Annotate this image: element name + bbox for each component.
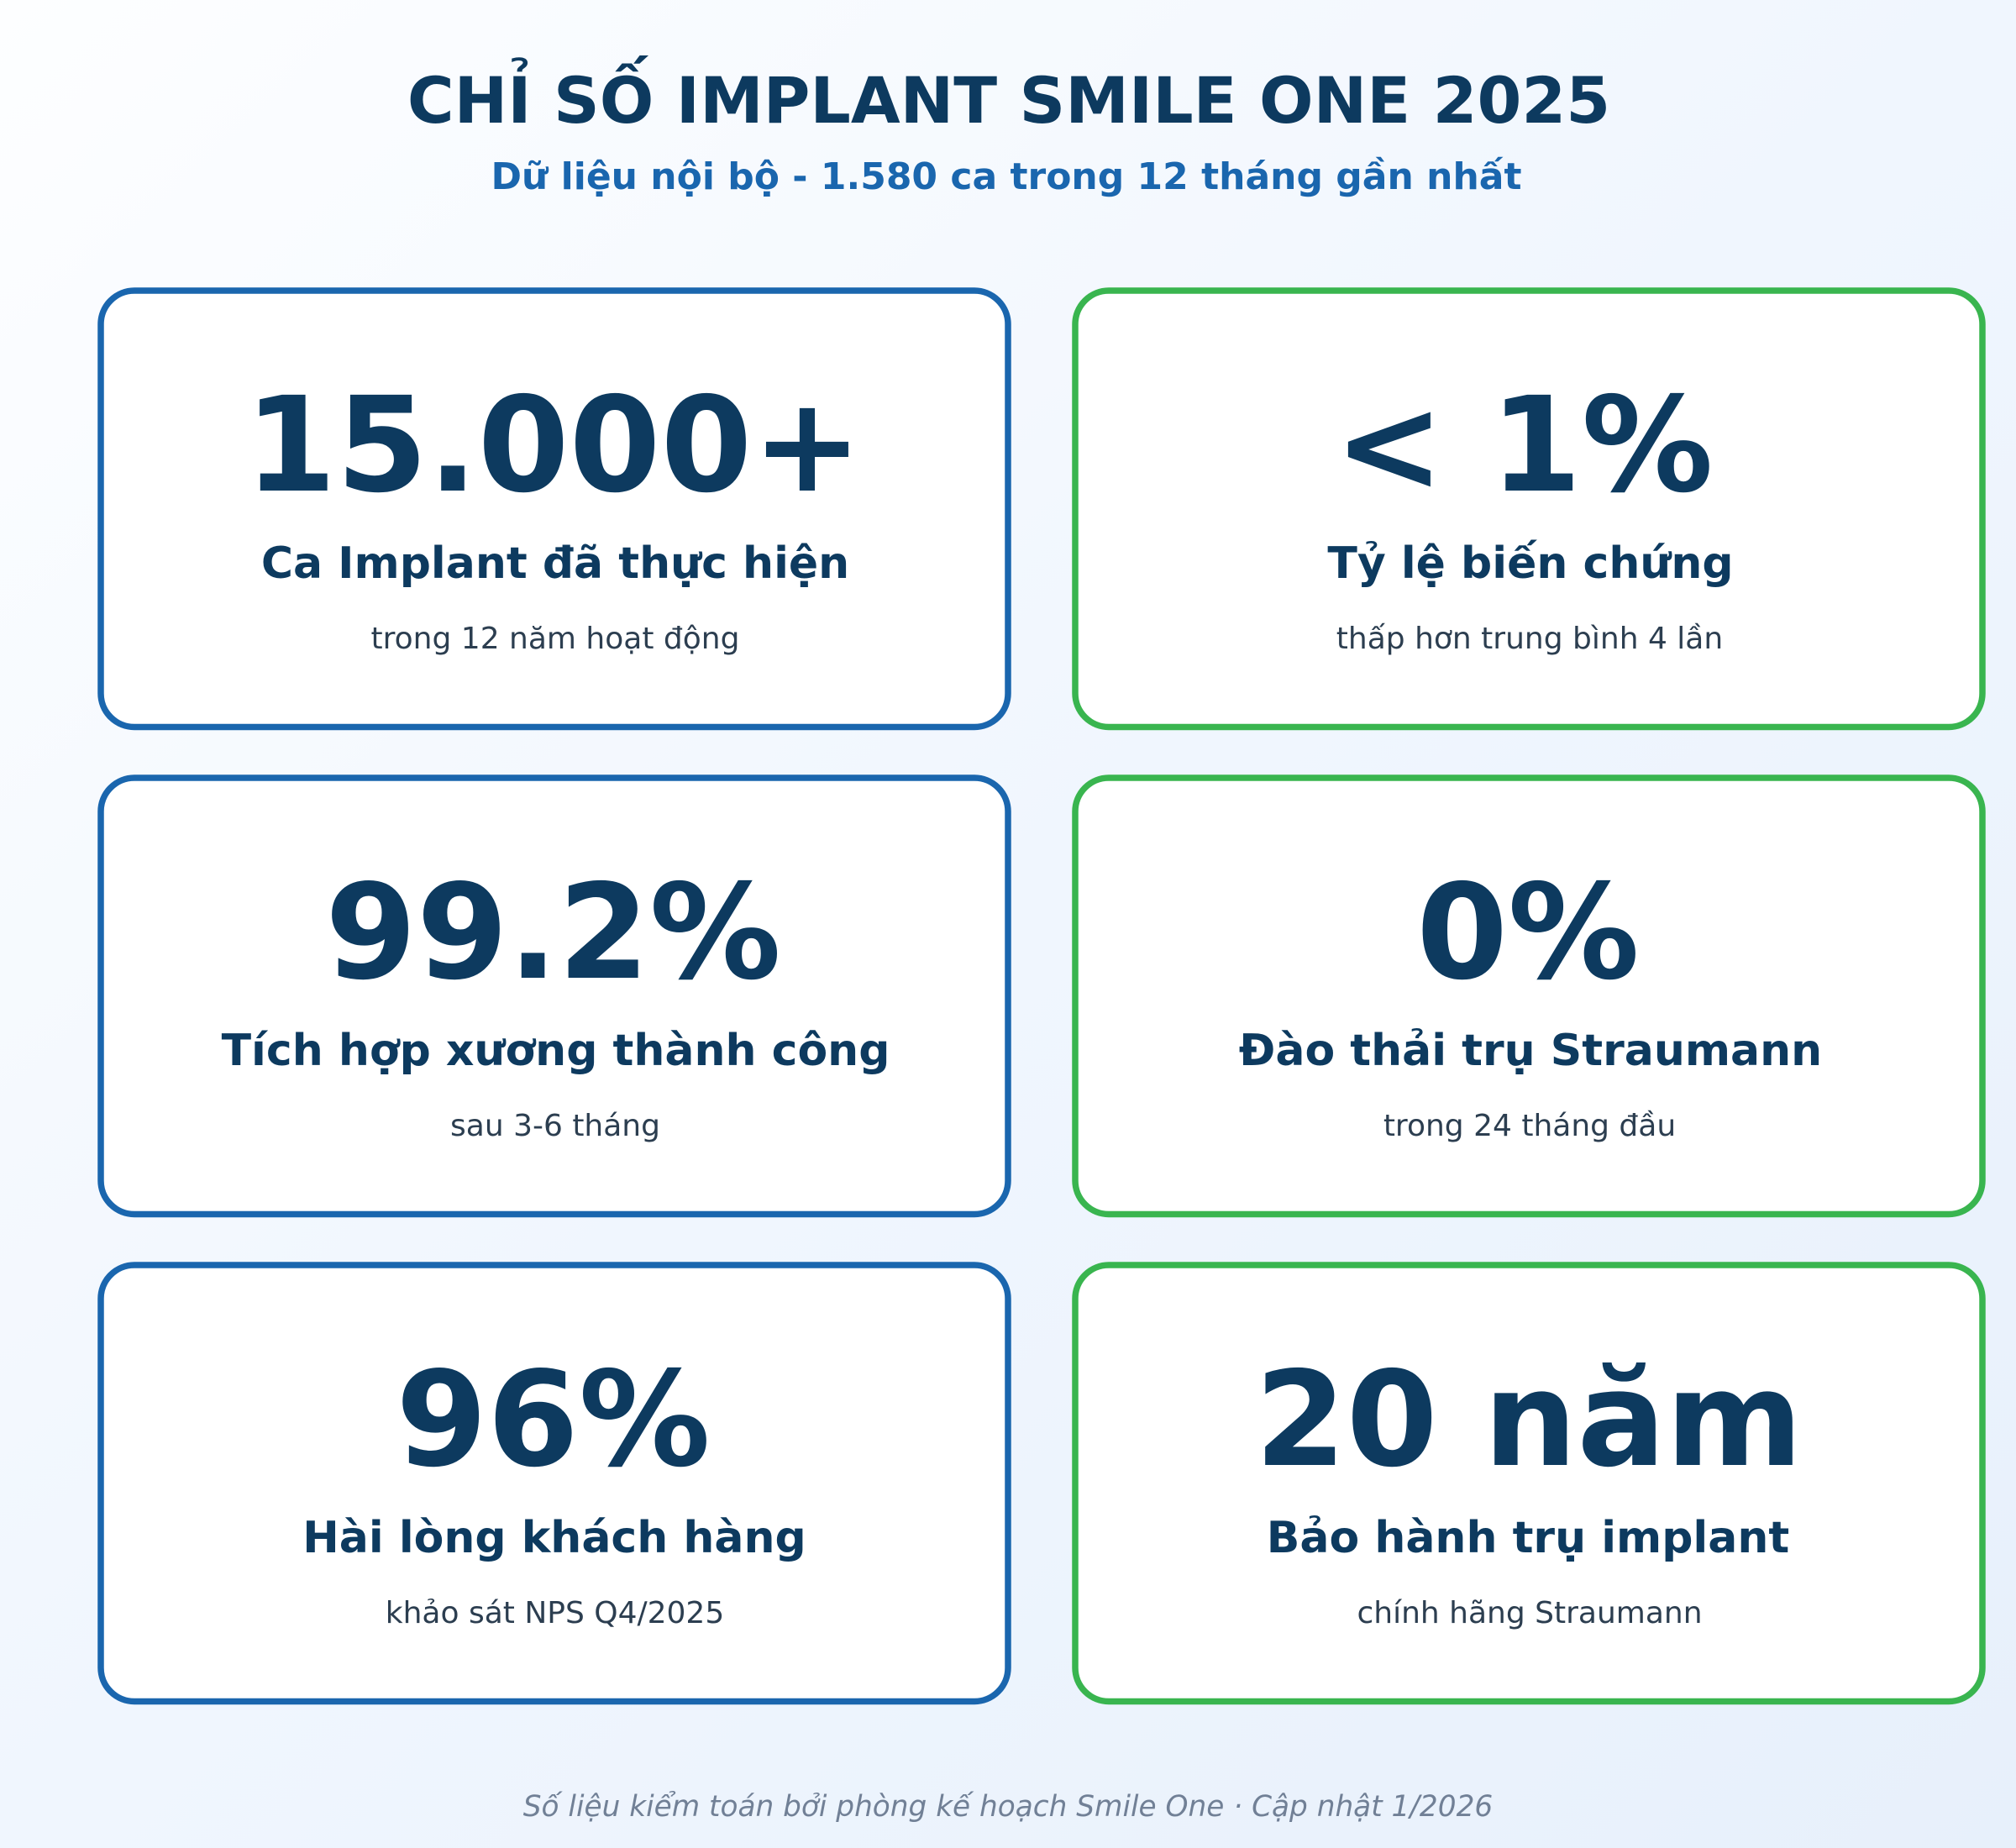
stat note: khảo sát NPS Q4/2025	[386, 1596, 724, 1630]
stat note: thấp hơn trung bình 4 lần	[1336, 622, 1723, 656]
stat label: Đào thải trụ Straumann	[1239, 1026, 1822, 1076]
stat note: chính hãng Straumann	[1357, 1596, 1703, 1630]
stat note: trong 12 năm hoạt động	[371, 622, 739, 656]
stat label: Bảo hành trụ implant	[1267, 1513, 1789, 1563]
stat value: 0%	[1416, 856, 1640, 1009]
stat value: 99.2%	[325, 856, 781, 1009]
stat label: Tỷ lệ biến chứng	[1327, 538, 1734, 589]
stat label: Tích hợp xương thành công	[222, 1026, 890, 1076]
stat value: < 1%	[1334, 369, 1714, 522]
stat note: sau 3-6 tháng	[450, 1109, 660, 1143]
panel: complication rate	[1075, 291, 1982, 727]
panel: osseointegration	[101, 778, 1008, 1215]
panel: Straumann rejection	[1075, 778, 1982, 1215]
stat value: 20 năm	[1255, 1343, 1803, 1496]
stat value: 15.000+	[244, 369, 863, 522]
title: CHỈ SỐ IMPLANT SMILE ONE 2025	[407, 55, 1610, 138]
footer note: Số liệu kiểm toán bởi phòng kế hoạch Smile One · Cập nhật 1/2026	[523, 1790, 1493, 1824]
panel: warranty	[1075, 1265, 1982, 1702]
panel: customer satisfaction	[101, 1265, 1008, 1702]
stat note: trong 24 tháng đầu	[1383, 1109, 1676, 1143]
subtitle: Dữ liệu nội bộ - 1.580 ca trong 12 tháng gần nhất	[491, 155, 1522, 198]
stat label: Hài lòng khách hàng	[302, 1513, 806, 1563]
stat label: Ca Implant đã thực hiện	[261, 538, 849, 589]
stat value: 96%	[396, 1343, 711, 1496]
panel: implant cases	[101, 291, 1008, 727]
